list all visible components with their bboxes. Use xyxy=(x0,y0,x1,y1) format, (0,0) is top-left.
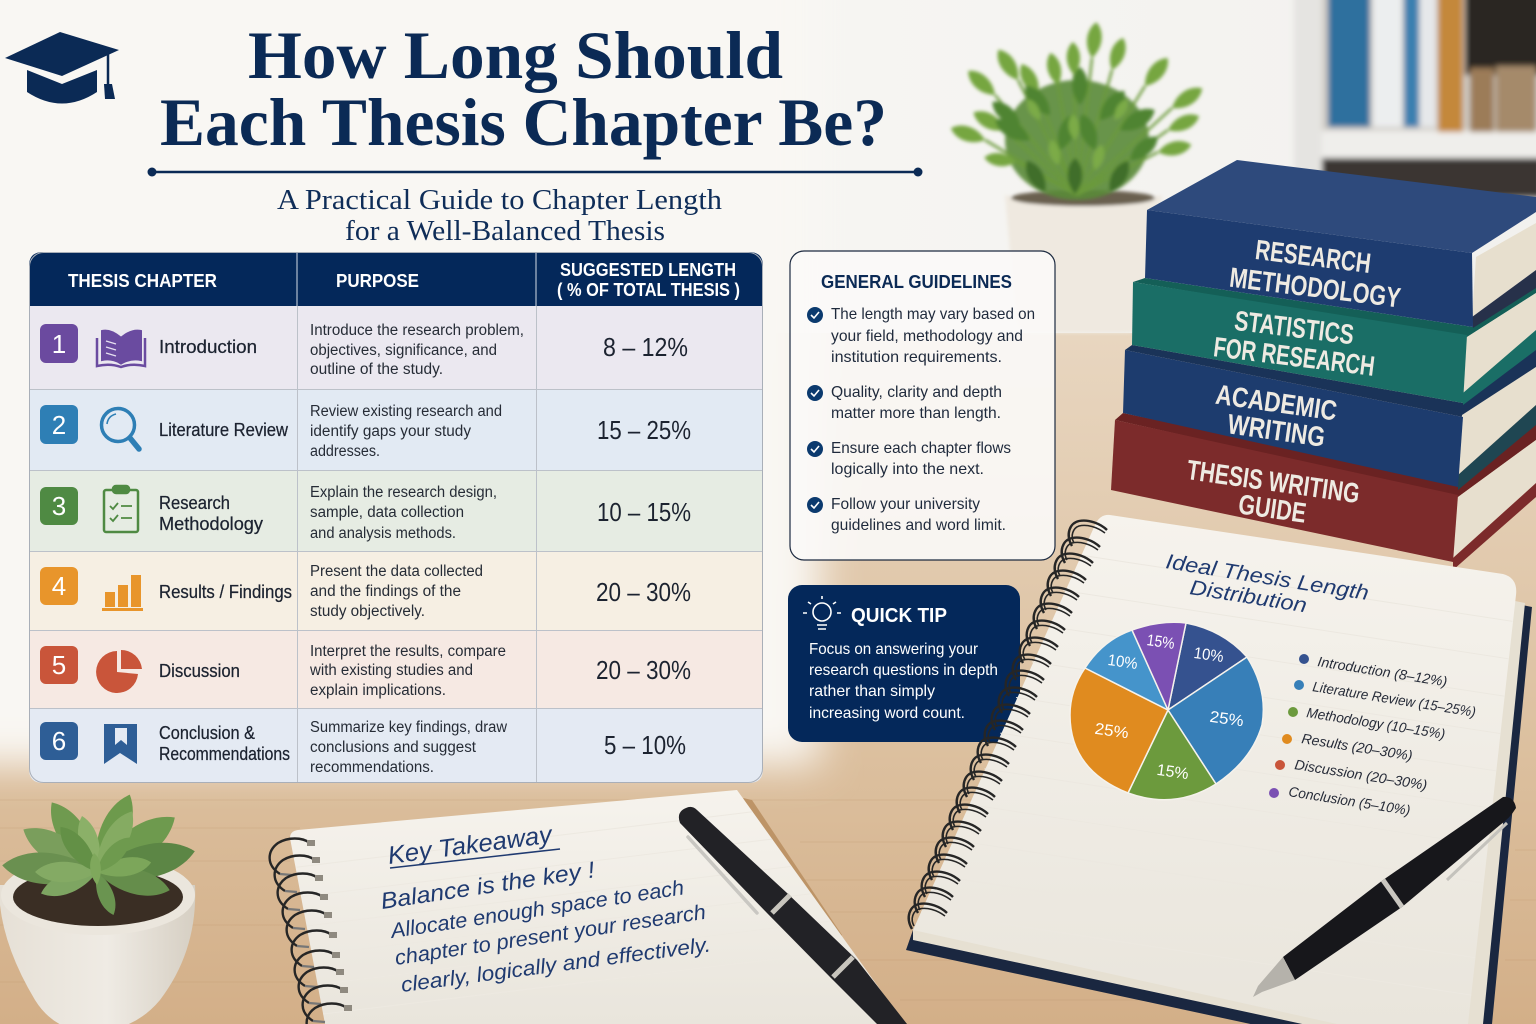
row 1: introduction: Introduction xyxy=(159,337,257,357)
pie legend xyxy=(1269,653,1477,818)
table header: SUGGESTED LENGTH xyxy=(560,259,736,280)
row 3: research methodology: 3 xyxy=(52,491,66,521)
pie chart xyxy=(1070,622,1263,800)
row 3: research methodology xyxy=(29,470,763,551)
row 4: results: 4 xyxy=(52,571,66,601)
panel: quick tip: research questions in depth xyxy=(809,662,998,679)
guideline 1: your field, methodology and xyxy=(831,328,1023,345)
pie chart: 10% xyxy=(1107,652,1139,673)
row 2: literature review: Review existing research and xyxy=(310,403,502,420)
subtitle xyxy=(277,184,723,247)
spiral binding xyxy=(270,838,352,1024)
panel: general guidelines: GENERAL GUIDELINES xyxy=(821,271,1012,292)
row 4: results xyxy=(29,551,763,630)
guideline 4 xyxy=(807,496,1006,534)
guideline 3: logically into the next. xyxy=(831,461,984,478)
bookshelf (blurred background) xyxy=(1294,0,1536,200)
book: research methodology: RESEARCH xyxy=(1254,234,1373,279)
icon: open book xyxy=(97,331,145,367)
row 6: conclusion: 5 – 10% xyxy=(604,730,686,760)
pie chart: 15% xyxy=(1156,762,1190,783)
guideline 2: matter more than length. xyxy=(831,405,1001,422)
spiral binding xyxy=(909,521,1107,929)
guideline 4: guidelines and word limit. xyxy=(831,517,1006,534)
divider xyxy=(148,168,922,176)
row 3: research methodology: Explain the research design, xyxy=(310,484,497,501)
foliage xyxy=(949,21,1206,200)
icon: pie chart xyxy=(96,650,142,693)
guideline 1 xyxy=(807,306,1035,366)
pen on left notebook xyxy=(679,807,907,1024)
row 4: results: Results / Findings xyxy=(159,582,292,602)
pie chart: 15% xyxy=(1146,632,1176,653)
row 5: discussion: explain implications. xyxy=(310,682,446,699)
pie legend: Literature Review (15–25%) xyxy=(1312,678,1477,720)
icon: light bulb xyxy=(803,596,841,629)
guideline 2 xyxy=(807,384,1002,422)
notebook heading xyxy=(1164,550,1370,617)
table header: PURPOSE xyxy=(336,270,419,291)
handwritten note: clearly, logically and effectively. xyxy=(400,933,712,997)
book: statistics for research: FOR RESEARCH xyxy=(1212,331,1376,382)
row 5: discussion xyxy=(29,630,763,708)
book: thesis writing guide xyxy=(1111,413,1536,570)
table header: THESIS CHAPTER xyxy=(68,270,217,291)
soil xyxy=(13,868,183,926)
handwritten note: Allocate enough space to each xyxy=(387,876,685,943)
panel: quick tip: rather than simply xyxy=(809,683,935,700)
row 2: literature review xyxy=(29,389,763,470)
row 6: conclusion: conclusions and suggest xyxy=(310,739,477,756)
icon: magnifier xyxy=(102,408,139,449)
notebook: key takeaway xyxy=(270,790,950,1024)
icon: bookmark xyxy=(104,724,137,764)
row 2: literature review: 15 – 25% xyxy=(597,415,691,445)
icon: graduation cap xyxy=(5,32,119,104)
book: statistics for research: STATISTICS xyxy=(1233,305,1356,350)
row 2: literature review: addresses. xyxy=(310,443,380,460)
row 6: conclusion: 6 xyxy=(52,726,66,756)
book: statistics for research xyxy=(1132,278,1536,405)
book: academic writing: WRITING xyxy=(1226,408,1327,453)
panel: quick tip xyxy=(788,585,1020,742)
row 1: introduction: 1 xyxy=(52,329,66,359)
pie legend: Results (20–30%) xyxy=(1301,730,1414,763)
row 6: conclusion xyxy=(29,708,763,783)
row 6: conclusion: Recommendations xyxy=(159,744,290,764)
row 2: literature review: identify gaps your study xyxy=(310,423,471,440)
row 3: research methodology: 10 – 15% xyxy=(597,497,691,527)
guideline 3: Ensure each chapter flows xyxy=(831,440,1011,457)
book: academic writing xyxy=(1123,345,1536,490)
row 5: discussion: Interpret the results, compare xyxy=(310,643,506,660)
title: Each Thesis Chapter Be? xyxy=(160,84,887,160)
handwritten note xyxy=(379,820,712,997)
row 6: conclusion: Summarize key findings, draw xyxy=(310,719,508,736)
row 4: results: study objectively. xyxy=(310,603,425,620)
pie legend: Discussion (20–30%) xyxy=(1294,756,1428,793)
guideline 2: Quality, clarity and depth xyxy=(831,384,1002,401)
pie chart: 10% xyxy=(1193,645,1225,666)
row 5: discussion: 5 xyxy=(52,650,66,680)
row 6: conclusion: recommendations. xyxy=(310,759,434,776)
table header: ( % OF TOTAL THESIS ) xyxy=(557,279,740,300)
panel: chapter table xyxy=(29,252,763,783)
subtitle: for a Well-Balanced Thesis xyxy=(345,215,665,247)
guideline 1: institution requirements. xyxy=(831,349,1002,366)
panel: quick tip: Focus on answering your xyxy=(809,641,979,658)
row 3: research methodology: Research xyxy=(159,493,230,513)
row 3: research methodology: and analysis methods. xyxy=(310,525,456,542)
book: academic writing: ACADEMIC xyxy=(1214,379,1339,426)
row 3: research methodology: sample, data collection xyxy=(310,504,464,521)
succulent leaves xyxy=(1,789,198,918)
row 1: introduction: objectives, significance, and xyxy=(310,342,497,359)
guideline 1: The length may vary based on xyxy=(831,306,1035,323)
row 4: results: and the findings of the xyxy=(310,583,461,600)
row 1: introduction: outline of the study. xyxy=(310,361,443,378)
row 1: introduction: Introduce the research problem, xyxy=(310,322,524,339)
potted plant (blurred background) xyxy=(949,21,1206,333)
title: How Long Should xyxy=(248,17,783,93)
panel: general guidelines xyxy=(790,251,1055,560)
panel: quick tip: increasing word count. xyxy=(809,705,965,722)
row 1: introduction: 8 – 12% xyxy=(603,332,688,362)
row 2: literature review: 2 xyxy=(52,410,66,440)
book: research methodology: METHODOLOGY xyxy=(1228,262,1403,313)
row 4: results: Present the data collected xyxy=(310,563,483,580)
pot xyxy=(0,885,195,1024)
row 4: results: 20 – 30% xyxy=(596,577,691,607)
title xyxy=(160,17,887,160)
handwritten note: chapter to present your research xyxy=(393,901,707,970)
icon: bar chart xyxy=(102,575,143,611)
pen on right notebook xyxy=(1253,797,1516,997)
guideline 3 xyxy=(807,440,1011,478)
row 2: literature review: Literature Review xyxy=(159,420,289,440)
handwritten note: Key Takeaway xyxy=(386,820,555,870)
pie legend: Methodology (10–15%) xyxy=(1306,704,1446,742)
book: thesis writing guide: GUIDE xyxy=(1236,489,1308,529)
table header xyxy=(29,252,763,306)
pie legend: Introduction (8–12%) xyxy=(1317,653,1448,689)
plant pot xyxy=(1005,190,1162,333)
row 5: discussion: 20 – 30% xyxy=(596,655,691,685)
panel: quick tip: QUICK TIP xyxy=(851,605,947,627)
row 1: introduction xyxy=(29,306,763,389)
notebook: right with pie chart xyxy=(880,515,1536,1024)
row 5: discussion: Discussion xyxy=(159,661,240,681)
stack of books xyxy=(1111,160,1536,570)
notebook heading: Distribution xyxy=(1188,576,1308,617)
book: research methodology xyxy=(1145,160,1536,328)
subtitle: A Practical Guide to Chapter Length xyxy=(277,184,723,216)
succulent plant in pot xyxy=(0,789,198,1024)
handwritten note: Balance is the key ! xyxy=(379,856,597,914)
guideline 4: Follow your university xyxy=(831,496,980,513)
book: thesis writing guide: THESIS WRITING xyxy=(1185,454,1362,509)
pie chart: 25% xyxy=(1094,721,1130,742)
pie legend: Conclusion (5–10%) xyxy=(1288,783,1412,818)
icon: clipboard checklist xyxy=(104,486,138,532)
notebook heading: Ideal Thesis Length xyxy=(1164,550,1370,605)
row 6: conclusion: Conclusion & xyxy=(159,723,255,743)
pie chart: 25% xyxy=(1209,709,1245,730)
row 3: research methodology: Methodology xyxy=(159,514,263,534)
row 5: discussion: with existing studies and xyxy=(309,662,473,679)
